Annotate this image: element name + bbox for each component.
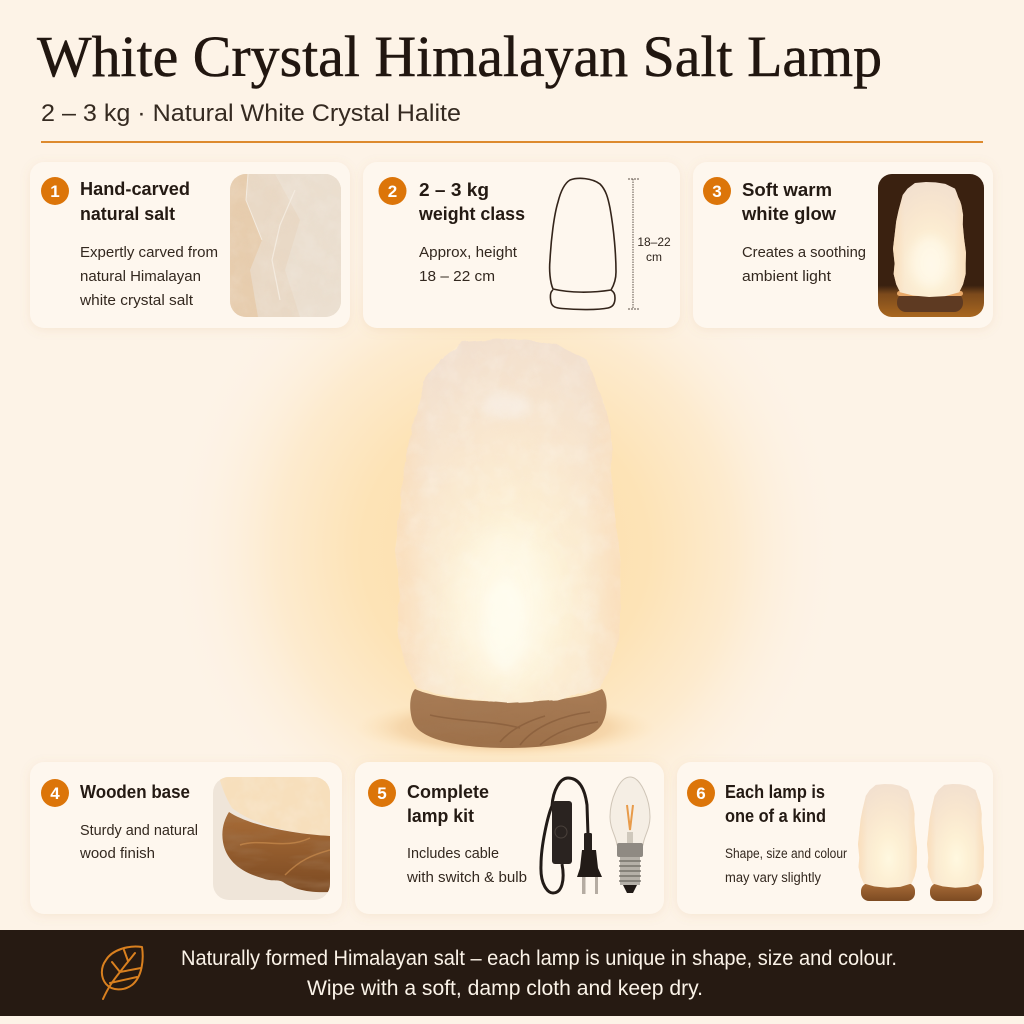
dimension line	[628, 179, 639, 309]
number badge 5	[368, 779, 396, 807]
number badge 2: 2	[388, 182, 397, 201]
icon: cable with switch and plug	[541, 778, 602, 894]
body 1: white crystal salt	[79, 293, 193, 309]
heading 5: Complete	[407, 781, 489, 802]
number badge 4: 4	[50, 784, 60, 803]
image: wooden base close-up	[213, 777, 331, 900]
body 4: wood finish	[79, 846, 155, 862]
heading 2: weight class	[418, 203, 525, 224]
icon: leaf	[102, 947, 143, 999]
lamp glow	[165, 210, 845, 890]
image: salt texture	[230, 174, 341, 317]
body 2: 18 – 22 cm	[419, 269, 495, 285]
dimension label: 18–22	[637, 235, 671, 249]
heading 3: white glow	[741, 203, 837, 224]
number badge 4	[41, 779, 69, 807]
icon: filament bulb	[610, 777, 650, 893]
panel: weight class	[363, 162, 680, 328]
body 6: may vary slightly	[725, 870, 821, 885]
image: lit lamp	[878, 174, 984, 317]
heading 3: Soft warm	[742, 179, 832, 200]
body 6: Shape, size and colour	[725, 846, 847, 861]
title rule	[41, 141, 983, 143]
image: second small lamp	[927, 784, 984, 901]
number badge 6: 6	[696, 784, 706, 803]
lamp wooden base	[410, 689, 607, 748]
number badge 3: 3	[712, 182, 722, 201]
body 2: Approx, height	[419, 245, 517, 261]
heading 6: Each lamp is	[725, 781, 825, 802]
footer band	[0, 930, 1024, 1016]
number badge 1	[41, 177, 69, 205]
title: White Crystal Himalayan Salt Lamp	[37, 24, 882, 89]
heading 6: one of a kind	[725, 805, 826, 826]
footer text: Wipe with a soft, damp cloth and keep dry.	[307, 977, 703, 1000]
panel: one of a kind	[677, 762, 993, 914]
footer text: Naturally formed Himalayan salt – each lamp is unique in shape, size and colour.	[181, 947, 897, 970]
panel: soft warm white glow	[693, 162, 993, 328]
body 3: Creates a soothing	[742, 245, 866, 261]
main salt lamp	[390, 335, 625, 751]
number badge 5: 5	[377, 784, 387, 803]
number badge 3	[703, 177, 731, 205]
body 3: ambient light	[742, 269, 831, 285]
dimension label: cm	[646, 250, 662, 264]
lamp salt body	[390, 335, 625, 707]
body 5: Includes cable	[407, 846, 499, 862]
number badge 6	[687, 779, 715, 807]
body 1: Expertly carved from	[80, 245, 218, 261]
body 1: natural Himalayan	[80, 269, 201, 285]
panel: hand-carved natural salt	[30, 162, 350, 328]
image: first small lamp	[858, 784, 917, 901]
panel: wooden base	[30, 762, 342, 914]
body 4: Sturdy and natural	[80, 823, 198, 839]
number badge 2	[378, 177, 406, 205]
heading 2: 2 – 3 kg	[419, 179, 489, 200]
panel: complete lamp kit	[355, 762, 664, 914]
heading 5: lamp kit	[407, 805, 474, 826]
subtitle: 2 – 3 kg · Natural White Crystal Halite	[41, 100, 461, 127]
heading 1: natural salt	[80, 203, 175, 224]
icon: lamp outline	[550, 178, 616, 310]
heading 1: Hand-carved	[80, 178, 190, 199]
body 5: with switch & bulb	[406, 870, 527, 886]
number badge 1: 1	[50, 182, 60, 201]
heading 4: Wooden base	[80, 781, 190, 802]
